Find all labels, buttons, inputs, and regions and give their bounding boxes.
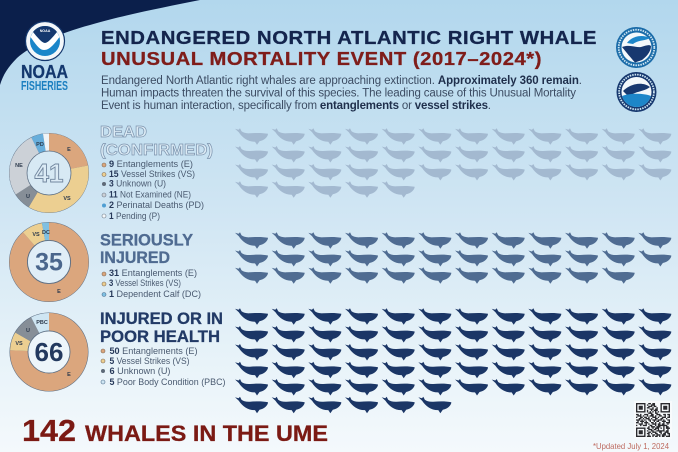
donut: injured 66: PBC xyxy=(36,320,48,326)
NOAA Fisheries logo xyxy=(21,22,68,93)
intro text: Endangered North Atlantic right whales are approaching extinction. Approximately 360 remain. xyxy=(101,75,582,87)
total: 142 whales in the UME: 142 xyxy=(22,413,76,448)
legend: dead xyxy=(102,159,204,222)
panel: injured or in poor health xyxy=(10,308,671,413)
panel: dead confirmed xyxy=(9,124,671,222)
legend: injured: 5 Vessel Strikes (VS) xyxy=(110,356,190,367)
donut: seriously injured 35 xyxy=(9,222,89,302)
NOAA Fisheries logo: NOAA xyxy=(21,62,68,82)
legend: injured: 5 Poor Body Condition (PBC) xyxy=(110,377,226,388)
heading: seriously injured xyxy=(100,232,193,267)
whale grid: 35 seriously injured xyxy=(235,232,671,284)
donut: dead 41: VS xyxy=(63,196,71,202)
heading: seriously injured: SERIOUSLY xyxy=(100,232,193,250)
donut: injured 66 xyxy=(10,312,88,392)
legend: dead: 3 Unknown (U) xyxy=(109,178,166,190)
intro text: Human impacts threaten the survival of this species. The leading cause of this Unusual Mortality xyxy=(101,88,576,100)
navy corner swoosh xyxy=(0,0,200,85)
donut: injured 66: VS xyxy=(15,341,23,347)
title: UNUSUAL MORTALITY EVENT (2017–2024*) xyxy=(101,48,542,69)
legend: dead: 9 Entanglements (E) xyxy=(109,159,193,170)
donut: injured 66: 66 xyxy=(35,337,63,367)
heading: injured or in poor health xyxy=(100,310,223,346)
total: 142 whales in the UME: WHALES IN THE UME xyxy=(85,421,328,446)
intro text xyxy=(101,75,582,112)
legend: injured xyxy=(101,346,226,388)
legend: injured: 50 Entanglements (E) xyxy=(110,346,198,357)
donut: seriously injured 35: 35 xyxy=(35,248,63,276)
heading: injured or in poor health: POOR HEALTH xyxy=(100,328,220,346)
donut: seriously injured 35: DC xyxy=(42,230,50,236)
legend: seriously injured: 1 Dependent Calf (DC) xyxy=(109,289,201,300)
icon: right whale emblem top xyxy=(616,27,657,68)
donut: seriously injured 35: E xyxy=(57,289,61,295)
QR code xyxy=(634,401,672,439)
legend: injured: 6 Unknown (U) xyxy=(110,366,170,377)
legend: dead: 1 Pending (P) xyxy=(109,211,160,222)
title: ENDANGERED NORTH ATLANTIC RIGHT WHALE xyxy=(101,27,597,48)
icon: right whale emblem bottom xyxy=(616,72,656,112)
donut: dead 41: E xyxy=(67,147,71,153)
legend: seriously injured: 3 Vessel Strikes (VS) xyxy=(109,278,181,289)
whale grid: 66 injured or in poor health xyxy=(235,308,671,413)
NOAA Fisheries logo: FISHERIES xyxy=(21,79,68,93)
donut: dead 41: 41 xyxy=(35,158,63,188)
heading: dead confirmed: DEAD xyxy=(100,124,147,141)
legend: seriously injured xyxy=(102,268,201,300)
update note: *Updated July 1, 2024 xyxy=(593,441,669,451)
heading: dead confirmed xyxy=(100,124,213,159)
heading: seriously injured: INJURED xyxy=(100,249,170,267)
whale grid: 41 dead xyxy=(235,128,671,198)
legend: dead: 15 Vessel Strikes (VS) xyxy=(109,169,195,180)
legend: seriously injured: 31 Entanglements (E) xyxy=(109,268,197,279)
donut: dead 41: U xyxy=(26,194,30,200)
donut: dead 41: PD xyxy=(36,142,44,148)
donut: dead 41 xyxy=(9,133,89,213)
donut: dead 41: NE xyxy=(15,163,23,169)
heading: injured or in poor health: INJURED OR IN xyxy=(100,310,223,328)
heading: dead confirmed: (CONFIRMED) xyxy=(100,142,213,159)
legend: dead: 11 Not Examined (NE) xyxy=(109,190,191,200)
legend: dead: 2 Perinatal Deaths (PD) xyxy=(109,200,204,211)
donut: injured 66: E xyxy=(67,372,71,378)
title xyxy=(101,27,597,69)
intro text: Event is human interaction, specifically from entanglements or vessel strikes. xyxy=(101,100,491,112)
total: 142 whales in the UME xyxy=(22,413,328,448)
panel: seriously injured xyxy=(9,222,671,302)
NOAA Fisheries logo: NOAA xyxy=(40,29,51,33)
donut: injured 66: U xyxy=(26,328,30,334)
donut: seriously injured 35: VS xyxy=(32,232,40,238)
